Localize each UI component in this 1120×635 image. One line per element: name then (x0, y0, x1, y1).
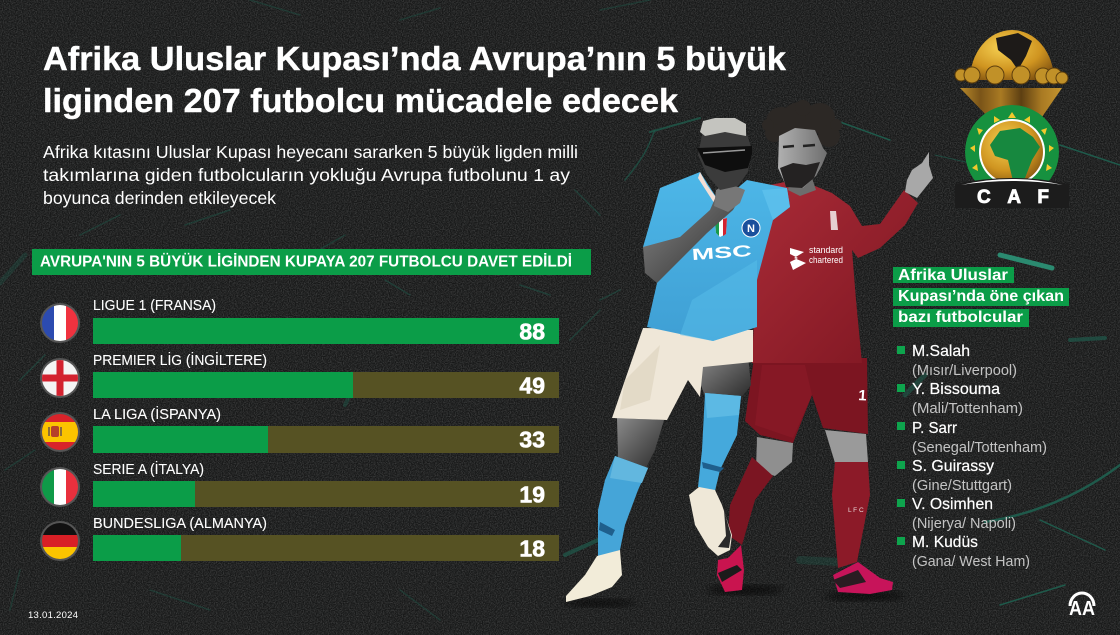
bar: La Liga Spain: LA LIGA (İSPANYA) (93, 405, 221, 423)
bar: La Liga Spain (93, 405, 559, 453)
bar: Ligue 1 France: LIGUE 1 (FRANSA) (93, 298, 216, 314)
list item: Salah: M.Salah (912, 343, 970, 360)
list item: Bissouma: Y. Bissouma (912, 381, 1000, 398)
trophy cup (960, 88, 1062, 117)
player: Osimhen (564, 118, 790, 607)
player: Osimhen: N (747, 223, 755, 235)
raised hand (905, 152, 933, 198)
sponsor (790, 248, 806, 270)
right leg (699, 356, 751, 398)
chart heading banner (32, 249, 591, 275)
icon: France flag (40, 303, 80, 343)
list item: Kudüs (897, 534, 1030, 570)
base cover (955, 178, 1069, 208)
player: Salah: 1 (858, 387, 867, 405)
bar: Serie A Italy: 19 (519, 482, 545, 508)
left leg (617, 418, 664, 468)
player: Salah (707, 100, 933, 601)
list item: Kudüs: M. Kudüs (912, 534, 978, 551)
player: Salah: standard (809, 245, 843, 255)
bar: Serie A Italy (93, 460, 559, 508)
list item: Bissouma (897, 381, 1023, 417)
trophy globe (970, 30, 1054, 80)
bar: Premier League England: PREMIER LİG (İNGİLTERE) (93, 351, 267, 369)
legs (756, 437, 793, 476)
list item: Bissouma: (Mali/Tottenham) (912, 401, 1023, 417)
bar: Bundesliga Germany (93, 516, 559, 562)
date: 13.01.2024 (28, 610, 78, 621)
list item: Guirassy: (Gine/Stuttgart) (912, 478, 1012, 494)
logo: AA: AA (1069, 598, 1095, 620)
title: liginden 207 futbolcu mücadele edecek (43, 82, 679, 119)
arm (643, 187, 743, 283)
side panel heading: Kupası’nda öne çıkan (898, 288, 1064, 305)
list item: Sarr: (Senegal/Tottenham) (912, 440, 1047, 456)
bar: Serie A Italy: SERIE A (İTALYA) (93, 460, 204, 478)
intro text (43, 142, 578, 208)
list item: Guirassy: S. Guirassy (912, 458, 994, 475)
icon: Spain flag (40, 412, 80, 452)
list item: Guirassy (897, 458, 1012, 494)
icon: Italy flag (40, 467, 80, 507)
intro text: Afrika kıtasını Uluslar Kupası heyecanı sararken 5 büyük ligden milli (43, 142, 578, 162)
chart heading banner: AVRUPA'NIN 5 BÜYÜK LİGİNDEN KUPAYA 207 FUTBOLCU DAVET EDİLDİ (40, 254, 572, 270)
shorts (612, 328, 753, 420)
bar: Bundesliga Germany: 18 (519, 536, 545, 562)
boots (717, 545, 744, 592)
sponsor and badges: MSC (691, 243, 753, 264)
head (762, 100, 842, 147)
shorts (745, 358, 868, 443)
title: Afrika Uluslar Kupası’nda Avrupa’nın 5 büyük (43, 40, 787, 77)
badge triangles (970, 112, 1054, 171)
list item: Kudüs: (Gana/ West Ham) (912, 554, 1030, 570)
player list (897, 343, 1047, 570)
side panel heading (893, 267, 1069, 327)
player: Salah: L F C (848, 507, 864, 514)
bar: Ligue 1 France (93, 298, 559, 344)
green badge (965, 105, 1059, 181)
list item: Sarr (897, 420, 1047, 456)
list item: Osimhen (897, 496, 1016, 532)
bar: Premier League England: 49 (519, 372, 545, 398)
jersey (643, 172, 790, 341)
head (698, 122, 752, 190)
list item: Sarr: P. Sarr (912, 420, 958, 437)
bar: Bundesliga Germany: BUNDESLIGA (ALMANYA) (93, 516, 267, 532)
intro text: boyunca derinden etkileyecek (43, 188, 276, 208)
trophy beads (955, 66, 1068, 84)
side panel heading: Afrika Uluslar (898, 267, 1008, 284)
title (43, 40, 787, 119)
icon: Germany flag (40, 521, 80, 561)
icon: England flag (40, 358, 80, 398)
side panel heading: bazı futbolcular (898, 309, 1023, 326)
bar: Ligue 1 France: 88 (519, 318, 545, 344)
bar: La Liga Spain: 33 (519, 426, 545, 452)
bar chart: leagues (93, 298, 559, 562)
logo: CAF and trophy (955, 30, 1069, 208)
hands and arm (748, 200, 792, 288)
list item: Osimhen: V. Osimhen (912, 496, 993, 513)
list item: Osimhen: (Nijerya/ Napoli) (912, 516, 1016, 532)
jersey (752, 182, 918, 363)
intro text: takımlarına giden futbolcuların yokluğu Avrupa futbolunu 1 ay (43, 165, 570, 185)
list item: Salah (897, 343, 1017, 379)
player: Salah: chartered (809, 255, 843, 265)
CAF wordmark: CAF (977, 187, 1049, 208)
bar: Premier League England (93, 351, 559, 398)
list item: Salah: (Mısır/Liverpool) (912, 363, 1017, 379)
